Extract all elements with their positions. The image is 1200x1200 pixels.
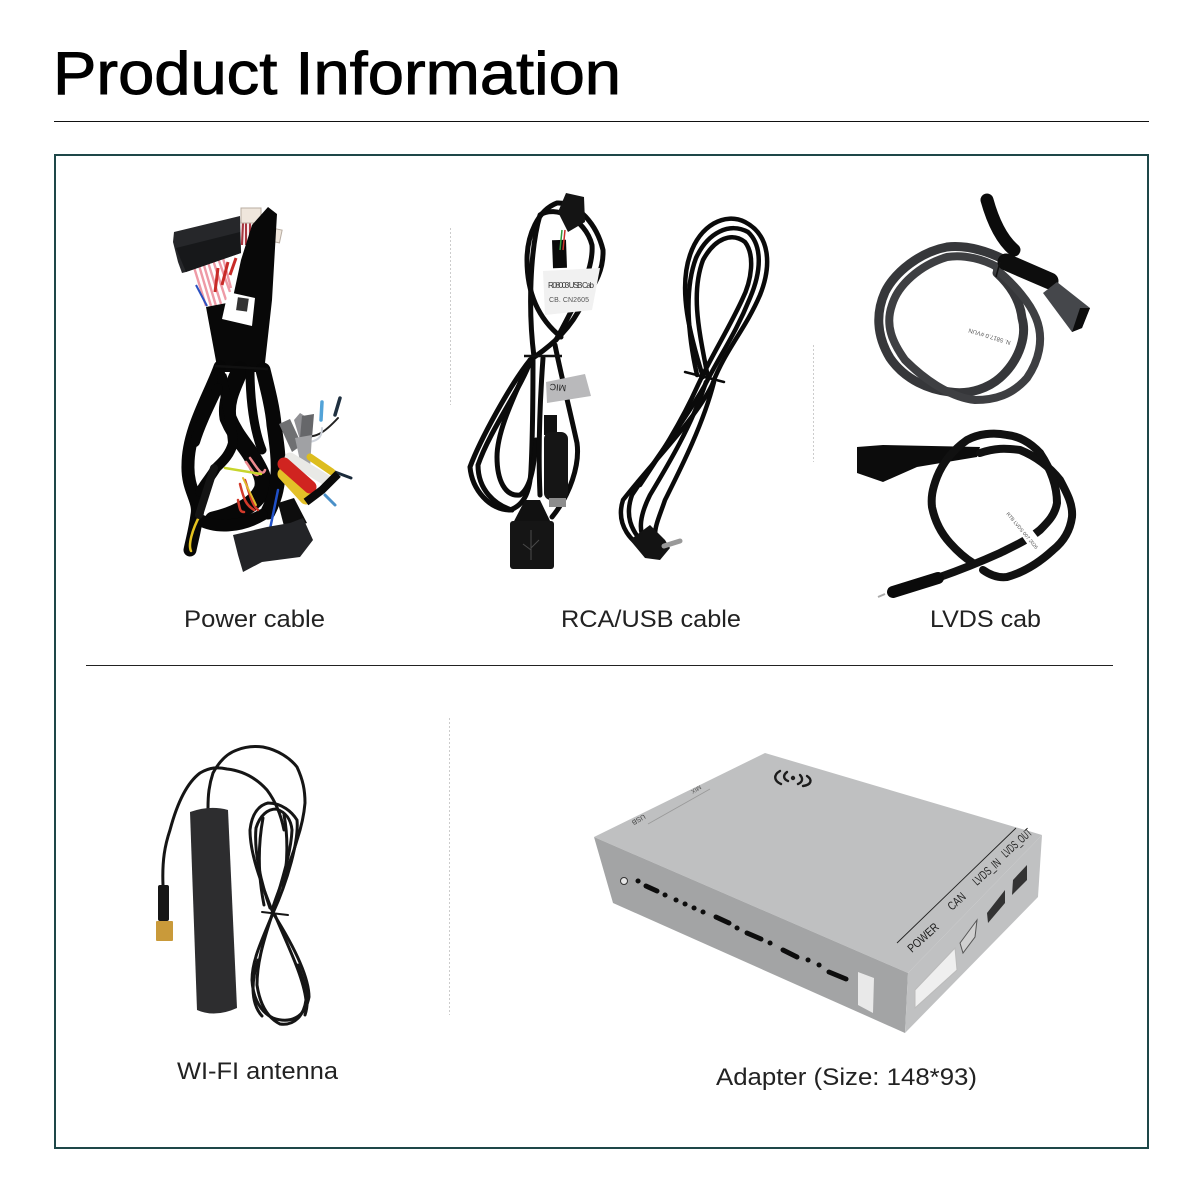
small label [1002,504,1040,552]
image: RCA/USB cable left [470,193,603,569]
RCA plugs [290,458,326,480]
end face labels: CAN [945,890,969,913]
3.5mm angled plug [630,525,670,560]
image: power cable harness [173,207,351,572]
white QR label [222,292,255,326]
antenna body [190,808,237,1014]
top face [594,753,1042,973]
image: RCA/USB cable left: MIC [549,382,567,393]
end face labels [905,827,1035,955]
wireless icon [775,771,810,786]
image: RCA/USB cable left: R08003 USB Cab [548,281,595,290]
label with text [543,268,600,315]
grey tags [279,419,302,452]
black bundles [206,207,277,372]
black bottom connector [278,498,307,530]
ports [915,948,957,1008]
side face [594,837,908,1033]
end face labels: LVDS_IN [971,857,1004,889]
wires under connector [193,222,271,306]
title: Product Information [53,40,621,107]
braided sleeve top [987,200,1014,250]
image: LVDS cable top: N. 5817.0 #VUN [968,326,1012,345]
image: LVDS cable top [879,200,1090,400]
image: RCA/USB cable left: CB. CN2605 [549,297,589,304]
top printed labels [648,789,710,824]
loose colored wires [190,398,351,551]
label: Wi-Fi antenna: WI-FI antenna [177,1058,339,1085]
SMA connector [158,885,169,921]
image: LVDS cable bottom [857,434,1072,597]
mic jack [544,415,557,435]
black connector [173,216,241,273]
end face labels: LVDS_OUT [999,827,1035,861]
image: audio cable right [621,219,767,560]
image: adapter box [594,753,1042,1033]
sticker [858,972,874,1013]
small lead connector [199,468,214,515]
panel: product frame [55,155,1148,1148]
white plugs [241,208,261,223]
tie [215,366,268,369]
label: power cable: Power cable [184,606,325,633]
side slots [638,881,846,979]
MIC tag [546,374,591,403]
image: LVDS cable bottom: RTB LVDS 007 2026 [1004,511,1039,551]
USB plug [512,500,552,525]
image: adapter box: MIX [689,783,702,794]
end face labels: POWER [905,921,942,955]
small label [972,321,1017,353]
image: adapter box: USB [630,812,646,826]
image: Wi-Fi antenna [156,746,309,1024]
plug [1043,282,1090,332]
label: LVDS cable: LVDS cab [930,606,1041,633]
label: RCA/USB cable: RCA/USB cable [561,606,741,633]
wires and black molex connector [558,193,585,232]
label: adapter: Adapter (Size: 148*93) [716,1064,977,1091]
screw [620,878,628,884]
end face [905,835,1042,1033]
